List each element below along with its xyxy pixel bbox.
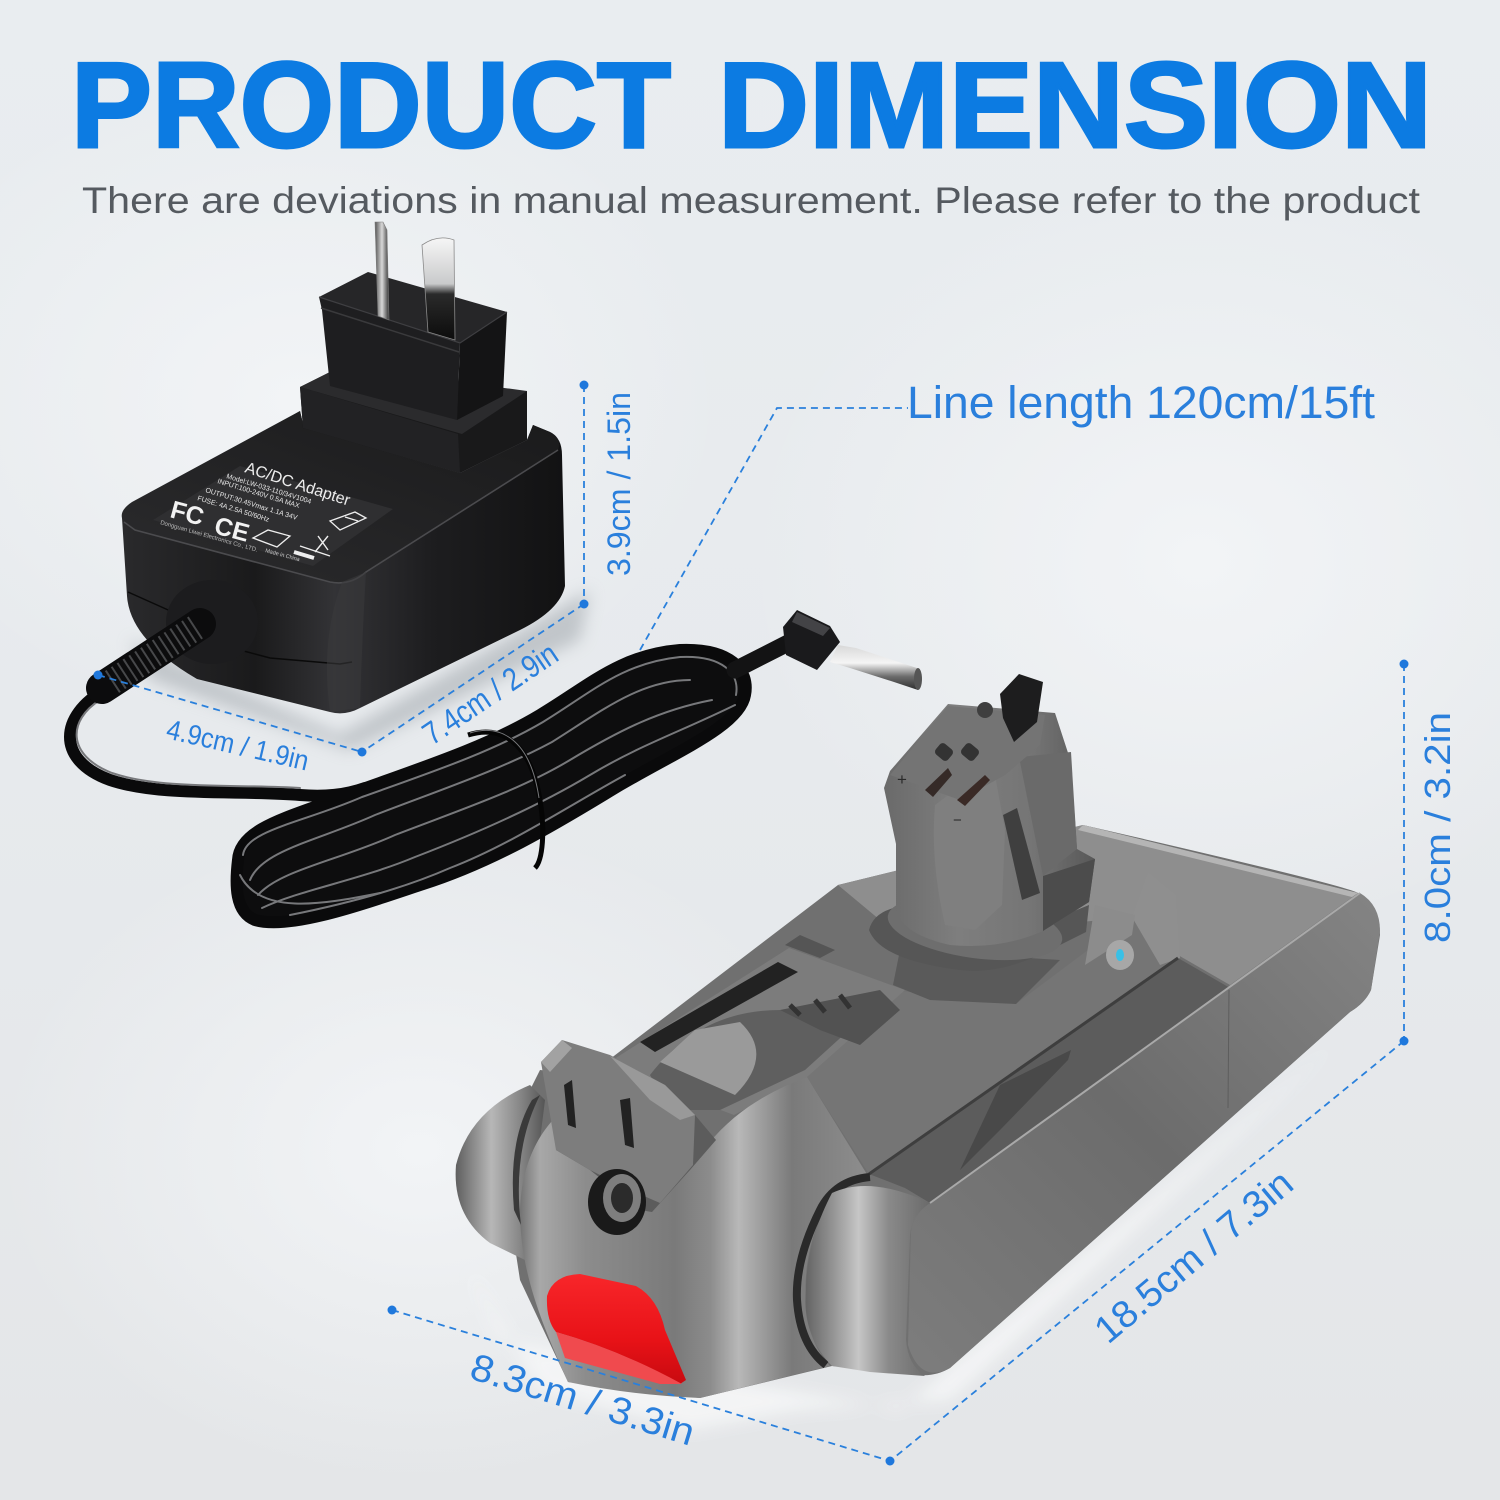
- connector tower: [869, 674, 1095, 1004]
- title: [71, 37, 1432, 173]
- label: adapter height: 3.9cm / 1.5in: [601, 392, 637, 576]
- plug block: [300, 272, 527, 473]
- status light: [1106, 940, 1134, 970]
- right end cap: [805, 1186, 930, 1376]
- label: battery width: 8.3cm / 3.3in: [465, 1346, 700, 1454]
- label: line length: Line length 120cm/15ft: [907, 377, 1376, 428]
- spec label: Dongguan Liwei Electronics Co., LTD.: [159, 520, 258, 554]
- spec label: Made in China: [264, 548, 301, 563]
- title: PRODUCT: [71, 37, 671, 173]
- top panel: [838, 825, 1358, 985]
- battery base body: [500, 825, 1380, 1398]
- prongs: [375, 222, 455, 340]
- spec label: [153, 460, 393, 566]
- upper ledge: [807, 917, 1178, 1174]
- front head: [513, 1077, 870, 1398]
- rear clip: [541, 1040, 716, 1212]
- tower terminal face: −: [953, 812, 962, 829]
- label: battery length: 18.5cm / 7.3in: [1087, 1162, 1301, 1352]
- DC connector: [735, 610, 922, 690]
- power adapter: [122, 222, 565, 713]
- strain relief: [102, 624, 200, 688]
- subtitle: There are deviations in manual measurement. Please refer to the product: [82, 180, 1421, 221]
- spec label: OUTPUT:30.45Vmax 1.1A 34V: [204, 487, 298, 522]
- spec label: AC/DC Adapter: [243, 460, 353, 510]
- left disc: [456, 1085, 545, 1260]
- charging jack: [588, 1169, 646, 1235]
- spec label: Model:LW-033-110/34V1004: [225, 473, 312, 506]
- label: battery height: 8.0cm / 3.2in: [1417, 712, 1458, 943]
- spec label: FUSE: 4A 2.5A 50/60Hz: [196, 495, 270, 524]
- tower body: [884, 704, 1095, 946]
- tower base ring: [869, 886, 1089, 1004]
- red release button: [547, 1274, 686, 1384]
- adapter shadow: [130, 590, 590, 750]
- title: DIMENSION: [718, 37, 1432, 173]
- tower terminal face: +: [897, 770, 907, 789]
- cable coil: [70, 610, 922, 922]
- spec label: FC: [167, 496, 207, 531]
- tower terminal face: [890, 702, 1045, 829]
- cable tie: [468, 732, 543, 868]
- dark lower section: [869, 958, 1230, 1203]
- chamber: [589, 935, 905, 1115]
- black latch: [1000, 674, 1043, 742]
- spec label: CE: [211, 512, 252, 548]
- cord grommet: [166, 580, 258, 664]
- battery shadow: [470, 1040, 1340, 1430]
- adapter body: [122, 411, 565, 713]
- battery: [456, 674, 1380, 1398]
- side slab: [908, 893, 1380, 1373]
- label: adapter width: 4.9cm / 1.9in: [164, 714, 312, 776]
- label: adapter length: 7.4cm / 2.9in: [416, 635, 564, 752]
- dimension lines: [94, 380, 1408, 1466]
- spec label: INPUT:100-240V 0.5A MAX: [216, 478, 301, 510]
